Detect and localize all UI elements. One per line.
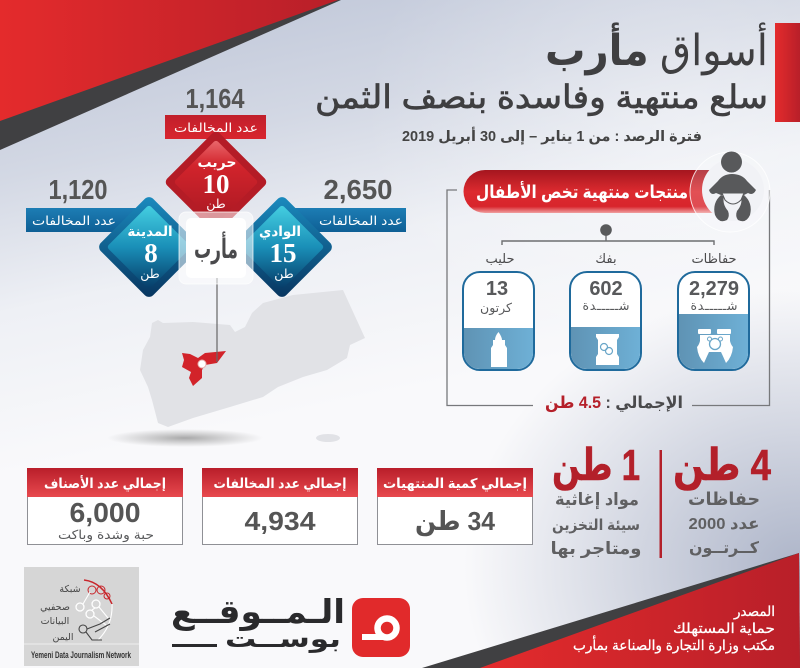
logo: Al-Mawqea Post wordmark: بوســت bbox=[225, 626, 341, 653]
bottom-right corner banner bbox=[422, 553, 800, 668]
card: diapers: حفاظات bbox=[691, 251, 737, 266]
stat: 4 tons: كــرتــون bbox=[689, 540, 760, 557]
diamond: wadi: طن bbox=[274, 267, 294, 282]
label: wadi violations: 2,650 bbox=[324, 174, 392, 205]
diamond: haris: حريب bbox=[198, 154, 236, 171]
card: total violations bbox=[202, 468, 358, 544]
icon: bottle bbox=[491, 332, 507, 367]
panel: children products frame bbox=[447, 190, 770, 406]
monitoring period: فترة الرصد : من 1 يناير – إلى 30 أبريل 2019 bbox=[402, 127, 702, 145]
card: total items bbox=[27, 468, 183, 544]
card: milk: حليب bbox=[485, 251, 515, 266]
stat: 1 ton: ومتاجر بها bbox=[550, 539, 642, 559]
stat: 4 tons bbox=[673, 441, 771, 557]
diamond: wadi bbox=[230, 195, 334, 299]
logo: Yemeni Data Journalism Network: البيانات bbox=[41, 616, 69, 627]
stat: 1 ton: سيئة التخزين bbox=[552, 517, 640, 534]
card: total violations: إجمالي عدد المخالفات bbox=[214, 476, 346, 491]
stat: 4 tons: حفاظات bbox=[688, 489, 760, 509]
map island bbox=[316, 434, 340, 442]
label: madina violations: 1,120 bbox=[48, 174, 108, 205]
logo: Yemeni Data Journalism Network bbox=[24, 567, 139, 666]
heading pill: children products: منتجات منتهية تخص الأطفال bbox=[476, 181, 688, 203]
top-left corner banner bbox=[0, 0, 341, 150]
source text: مكتب وزارة التجارة والصناعة بمأرب bbox=[573, 635, 775, 654]
stat: 1 ton bbox=[550, 441, 642, 559]
total: baby products: الإجمالي : 4.5 طن bbox=[545, 394, 683, 413]
diamond: wadi: 15 bbox=[270, 238, 296, 268]
label: wadi violations: عدد المخالفات bbox=[319, 214, 403, 228]
map: Yemen bbox=[107, 290, 365, 447]
connector bbox=[502, 224, 714, 245]
card: milk bbox=[463, 251, 534, 370]
card: milk: 13 bbox=[486, 278, 508, 300]
center card: marib bbox=[179, 212, 253, 284]
logo: red square icon bbox=[352, 598, 410, 657]
card: diapers: 2,279 bbox=[689, 278, 739, 300]
map shadow bbox=[107, 429, 263, 447]
icon: food bag bbox=[596, 334, 619, 365]
diamond: madina: 8 bbox=[144, 238, 158, 268]
logo: Yemeni Data Journalism Network: Yemeni Data Journalism Network bbox=[31, 650, 132, 660]
card: baby food bbox=[570, 251, 641, 370]
title: أسواق مأرب bbox=[545, 22, 768, 76]
card: total quantity: 34 طن bbox=[415, 506, 496, 537]
card: baby food: 602 bbox=[589, 278, 623, 300]
card: total quantity: إجمالي كمية المنتهيات bbox=[383, 476, 527, 491]
card: total items: إجمالي عدد الأصناف bbox=[44, 475, 166, 491]
source text: المصدر bbox=[733, 604, 775, 620]
card: diapers bbox=[678, 251, 749, 370]
stat: 4 tons: عدد 2000 bbox=[688, 516, 760, 533]
pointer line bbox=[198, 278, 217, 368]
logo: Al-Mawqea Post wordmark: الـمــوقــع bbox=[171, 593, 345, 632]
heading pill: children products bbox=[464, 170, 730, 213]
card: diapers: شـــــدة bbox=[690, 299, 738, 313]
icon: baby bbox=[690, 152, 770, 232]
stat: 1 ton: مواد إغاثية bbox=[555, 490, 639, 510]
card: baby food: شـــــدة bbox=[582, 299, 630, 313]
title: سلع منتهية وفاسدة بنصف الثمن bbox=[315, 79, 768, 116]
logo: Al-Mawqea Post wordmark bbox=[171, 593, 345, 653]
icon: network globe bbox=[76, 580, 112, 640]
label: madina violations bbox=[26, 174, 138, 232]
label: madina violations: عدد المخالفات bbox=[32, 214, 116, 228]
diamond: haris: 10 bbox=[202, 169, 230, 199]
source text: حماية المستهلك bbox=[673, 620, 775, 637]
icon: diaper bbox=[697, 329, 733, 363]
logo: Yemeni Data Journalism Network: اليمن bbox=[52, 632, 74, 643]
source text bbox=[573, 604, 775, 654]
diamond: madina: طن bbox=[140, 267, 160, 282]
diamond: wadi: الوادي bbox=[259, 224, 301, 240]
stat: 1 ton: 1 طن bbox=[552, 441, 640, 491]
card: total violations: 4,934 bbox=[244, 506, 316, 536]
card: total quantity bbox=[377, 468, 533, 544]
title bbox=[315, 22, 768, 116]
card: milk: كرتون bbox=[480, 301, 512, 316]
diamond: haris bbox=[164, 130, 268, 234]
diamond: madina: المدينة bbox=[127, 224, 173, 239]
center card: marib: مأرب bbox=[194, 231, 238, 265]
marib region bbox=[182, 351, 226, 386]
diamond: madina bbox=[97, 195, 201, 299]
diamond: haris: طن bbox=[206, 197, 226, 212]
label: haris violations: عدد المخالفات bbox=[174, 121, 258, 135]
label: wadi violations bbox=[292, 174, 406, 232]
logo: Yemeni Data Journalism Network: شبكة bbox=[59, 584, 81, 595]
divider bbox=[660, 450, 662, 558]
right red title tab bbox=[775, 23, 800, 122]
card: baby food: بفك bbox=[595, 251, 617, 266]
logo: Yemeni Data Journalism Network: صحفيي bbox=[40, 602, 70, 613]
card: total items: حبة وشدة وباكت bbox=[58, 528, 154, 543]
card: total items: 6,000 bbox=[70, 497, 140, 528]
label: haris violations: 1,164 bbox=[186, 83, 245, 114]
label: haris violations bbox=[165, 83, 266, 139]
stat: 4 tons: 4 طن bbox=[673, 441, 771, 491]
